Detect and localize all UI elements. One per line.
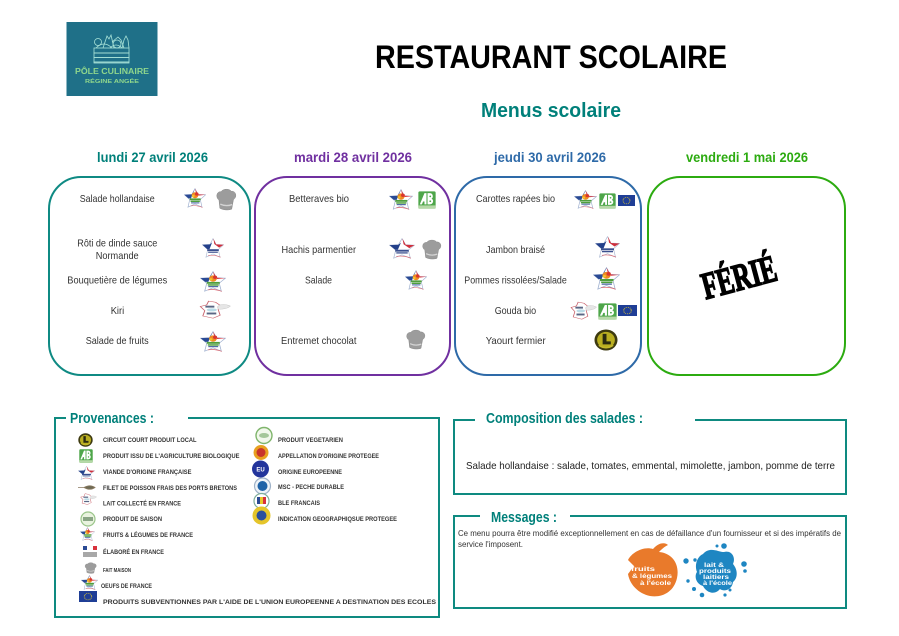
legend item: AOP: APPELLATION D'ORIGINE PROTEGEE <box>278 454 379 460</box>
dish: Rôti de dinde sauce Normande: Rôti de dinde sauce <box>77 238 157 250</box>
legend item: circuit court <box>78 433 197 447</box>
dish: Kiri: Kiri <box>111 305 124 317</box>
dish: Salade hollandaise: Salade hollandaise <box>80 193 155 205</box>
legend item: IGP <box>252 506 397 524</box>
text: message: Ce menu pourra être modifié exceptionnellement en cas de défaillance d'un fournisseur et si des impératifs de <box>458 529 842 538</box>
icon: fruits de France <box>594 268 619 289</box>
icon: viande française <box>202 239 224 257</box>
legend item: poisson: FILET DE POISSON FRAIS DES PORTS BRETONS <box>103 486 237 492</box>
logo: Pôle Culinaire: RÉGINE ANGÉE <box>85 77 140 85</box>
day heading: mardi: mardi 28 avril 2026 <box>294 150 412 165</box>
icons: viande française, fait maison <box>390 239 441 259</box>
dish: Bouquetière de légumes: Bouquetière de légumes <box>67 274 167 286</box>
dish: Rôti de dinde sauce Normande: Normande <box>96 250 139 262</box>
panel: vendredi férié <box>648 177 845 375</box>
legend item: fait maison <box>85 563 131 574</box>
logo: fruits et légumes à l'école: fruits <box>631 566 656 573</box>
icon: circuit court local <box>594 329 618 351</box>
day heading: jeudi: jeudi 30 avril 2026 <box>493 150 606 165</box>
legend item: végétarien <box>256 428 343 444</box>
logo: fruits et légumes à l'école <box>628 543 678 596</box>
dish: Pommes rissolées/Salade: Pommes rissolées/Salade <box>464 274 567 286</box>
heading: composition: Composition des salades : <box>486 411 643 427</box>
icon: fruits et légumes de France <box>201 272 225 291</box>
legend item: blé français: BLE FRANCAIS <box>278 501 320 507</box>
panel: lundi menu <box>49 177 250 375</box>
icons: fruits de France, bio, Europe <box>574 191 635 209</box>
legend item: saison: PRODUIT DE SAISON <box>103 517 162 523</box>
icons: lait, bio, Europe <box>571 302 637 320</box>
title: RESTAURANT SCOLAIRE <box>375 39 727 75</box>
logo: lait et produits laitiers à l'école: à l'école <box>703 580 733 587</box>
panel: jeudi menu <box>455 177 641 375</box>
panel: messages <box>454 510 846 608</box>
legend item: viande <box>78 466 192 479</box>
icon: viande française <box>596 237 620 257</box>
legend item: fruits et légumes: FRUITS & LÉGUMES DE FRANCE <box>103 531 193 539</box>
logo: Pôle Culinaire <box>66 22 158 96</box>
day heading: lundi: lundi 27 avril 2026 <box>97 150 208 165</box>
logo: lait et produits laitiers à l'école <box>683 543 747 597</box>
stamp: férié: FÉRIÉ <box>697 248 781 308</box>
icon: fait maison <box>407 330 425 349</box>
heading: messages: Messages : <box>491 510 557 526</box>
dish: Salade de fruits: Salade de fruits <box>86 335 149 347</box>
logo: fruits et légumes à l'école: à l'école <box>640 580 671 587</box>
legend item: blé français <box>254 494 320 508</box>
icons: fruits de France, bio <box>389 190 436 209</box>
panel: provenances legend <box>55 411 439 617</box>
legend item: lait: LAIT COLLECTÉ EN FRANCE <box>103 500 181 508</box>
logo: lait et produits laitiers à l'école: produits <box>699 568 732 575</box>
dish: Carottes rapées bio: Carottes rapées bio <box>476 193 555 205</box>
legend item: lait <box>81 494 181 508</box>
logo: fruits et légumes à l'école: & légumes <box>632 573 672 580</box>
icon: vegetable crate <box>94 35 129 63</box>
heading: provenances: Provenances : <box>70 411 154 427</box>
legend item: bio <box>79 449 240 463</box>
legend item: saison <box>81 512 162 526</box>
logo: lait et produits laitiers à l'école: laitiers <box>703 574 730 581</box>
dish: Jambon braisé: Jambon braisé <box>486 244 545 256</box>
dish: Betteraves bio: Betteraves bio <box>289 193 349 205</box>
legend item: oeufs: OEUFS DE FRANCE <box>101 584 152 590</box>
text: message <box>458 529 842 549</box>
dish: Rôti de dinde sauce Normande <box>77 238 157 262</box>
legend item: élaboré en France <box>83 546 164 557</box>
text: message: service l'imposent. <box>458 540 523 549</box>
dish: Salade: Salade <box>305 274 332 286</box>
legend item: circuit court: CIRCUIT COURT PRODUIT LOCAL <box>103 438 197 444</box>
dish: Entremet chocolat: Entremet chocolat <box>281 335 357 347</box>
legend item: origine européenne: EU <box>256 468 265 474</box>
dish: Yaourt fermier: Yaourt fermier <box>486 335 546 347</box>
legend item: IGP: INDICATION GEOGRAPHIQSUE PROTEGEE <box>278 517 397 523</box>
logo: Pôle Culinaire: PÔLE CULINAIRE <box>75 67 150 76</box>
legend item: AOP <box>254 445 379 460</box>
legend item: bio: PRODUIT ISSU DE L'AGRICULTURE BIOLOGIQUE <box>103 454 240 460</box>
day heading: vendredi: vendredi 1 mai 2026 <box>686 150 808 165</box>
legend item: origine européenne: ORIGINE EUROPEENNE <box>278 470 342 476</box>
icon: fruits et légumes de France <box>201 332 225 351</box>
dish: Hachis parmentier: Hachis parmentier <box>282 244 356 256</box>
legend item: MSC: MSC - PECHE DURABLE <box>278 485 344 491</box>
panel: mardi menu <box>255 177 450 375</box>
text: salade hollandaise composition: Salade hollandaise : salade, tomates, emmental, mimolette, jambon, pomme de terre <box>466 460 835 472</box>
icons: fruits de France, fait maison <box>184 189 236 210</box>
subtitle: Menus scolaire <box>481 99 621 122</box>
legend item: produits subventionnés <box>79 591 436 606</box>
icon: lait collecté en France <box>200 301 230 318</box>
panel: composition des salades <box>454 411 846 494</box>
dish: Gouda bio: Gouda bio <box>495 305 536 317</box>
legend item: produits subventionnés: PRODUITS SUBVENTIONNES PAR L'AIDE DE L'UNION EUROPEENNE A DESTINATION DES ECOLES <box>103 600 436 606</box>
legend item: élaboré en France: ÉLABORÉ EN FRANCE <box>103 548 164 556</box>
legend item: végétarien: PRODUIT VEGETARIEN <box>278 438 343 444</box>
legend item: fruits et légumes <box>80 527 193 541</box>
legend item: oeufs <box>81 575 152 590</box>
icon: fruits de France <box>405 271 427 289</box>
logo: lait et produits laitiers à l'école: lait & <box>704 562 725 569</box>
legend item: MSC <box>254 478 344 494</box>
legend item: viande: VIANDE D'ORIGINE FRANÇAISE <box>103 470 192 476</box>
legend item: fait maison: FAIT MAISON <box>103 568 131 574</box>
legend item: origine européenne <box>252 460 342 478</box>
